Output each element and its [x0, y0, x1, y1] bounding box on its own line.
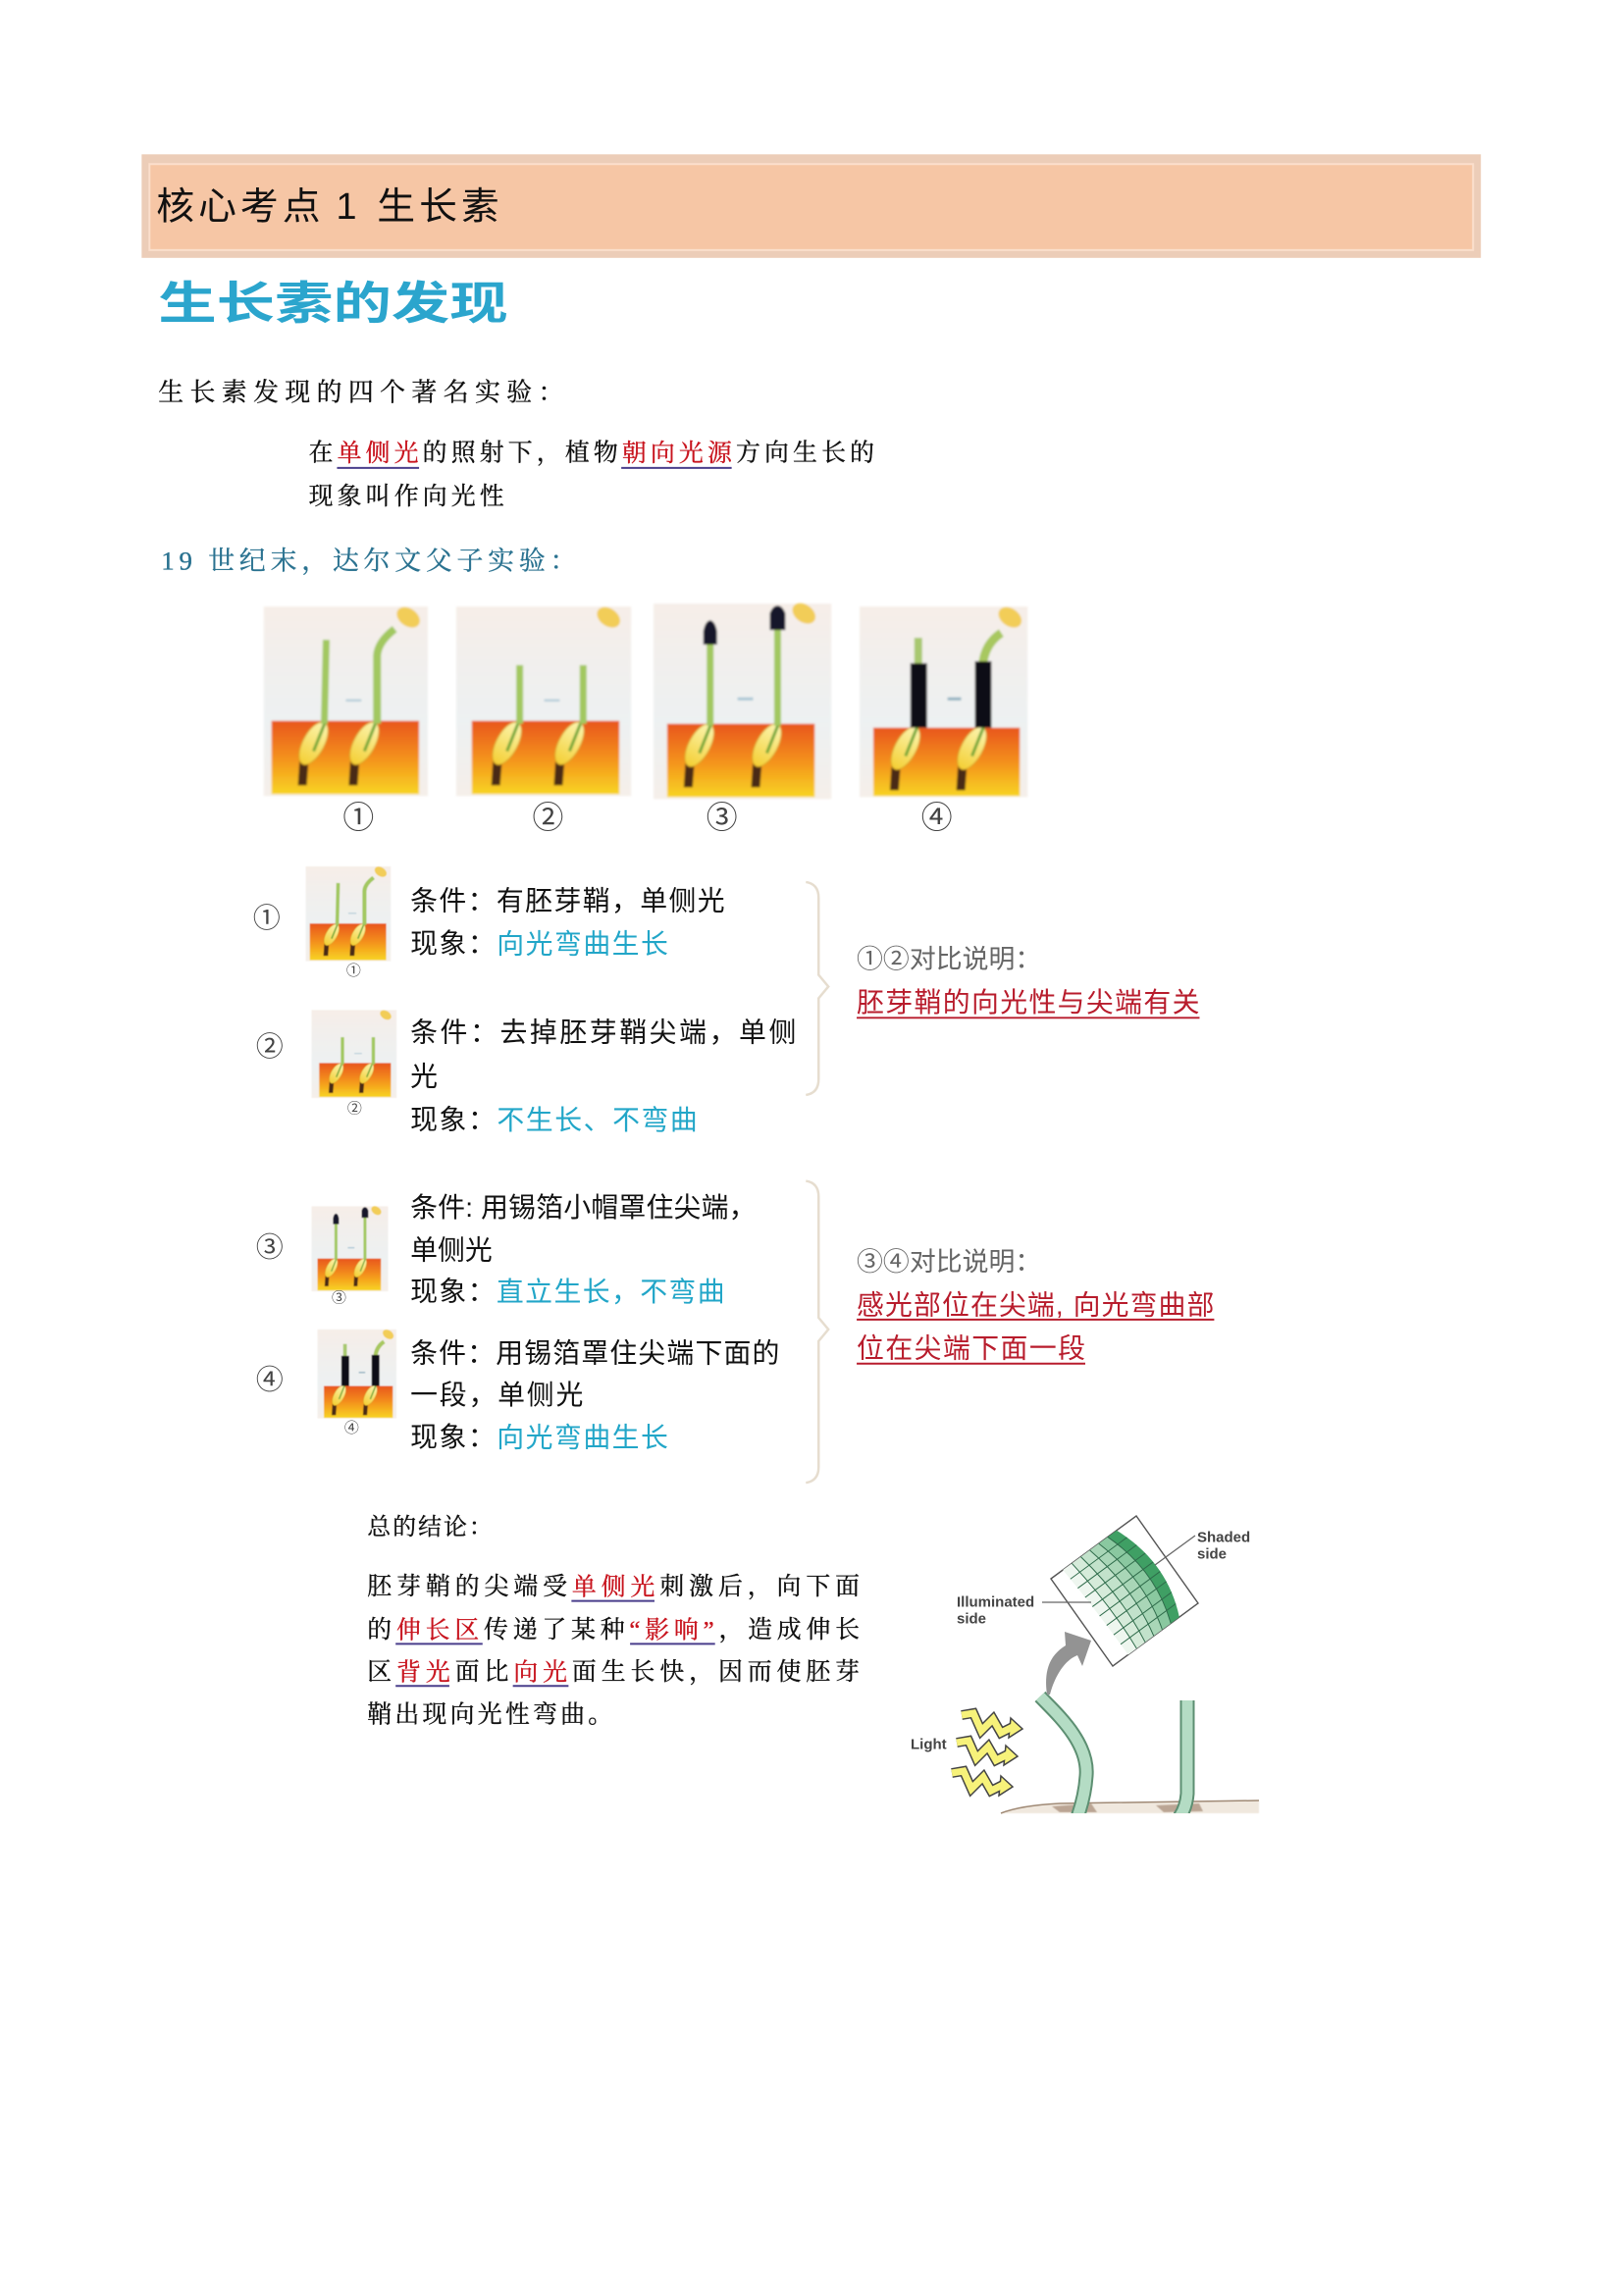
row numbers: ③ — [256, 1226, 284, 1265]
photo numbers — [342, 793, 953, 838]
thumbnails — [306, 864, 396, 1419]
label: illuminated side: Illuminated — [957, 1593, 1034, 1611]
text block: phototropism definition — [309, 439, 874, 510]
block: experiment 3 text: 现象：直立生长，不弯曲 — [410, 1277, 725, 1307]
conclusion text: 区背光面比向光面生长快，因而使胚芽 — [367, 1658, 860, 1686]
intro heading: 生长素发现的四个著名实验： — [158, 379, 563, 407]
arrow — [1046, 1632, 1091, 1695]
conclusion text: 鞘出现向光性弯曲。 — [367, 1701, 612, 1729]
conclusion text: 的伸长区传递了某种“影响”，造成伸长 — [367, 1616, 860, 1644]
brace 2 — [806, 1181, 828, 1483]
banner heading: 生长素 — [377, 186, 499, 229]
callout: comparison 3 and 4: ③④对比说明： — [857, 1247, 1041, 1277]
bent shoot — [1040, 1696, 1086, 1817]
photo numbers: ④ — [921, 793, 953, 838]
panel: experiment 1 — [264, 602, 428, 796]
row numbers: ① — [253, 897, 281, 936]
thumbnail captions: ③ — [332, 1287, 346, 1308]
panel: experiment 4 — [860, 602, 1027, 797]
photo numbers: ② — [533, 793, 563, 838]
thumbnail captions: ④ — [344, 1417, 359, 1437]
banner heading — [156, 186, 499, 229]
conclusion text: 胚芽鞘的尖端受单侧光刺激后，向下面 — [367, 1573, 860, 1600]
experiment heading: 19 世纪末，达尔文父子实验： — [161, 546, 576, 575]
label: shaded side — [1197, 1529, 1250, 1562]
thumbnail 3 — [312, 1204, 388, 1291]
row numbers: ④ — [256, 1359, 284, 1398]
conclusion heading: 总的结论： — [367, 1514, 493, 1540]
label: light: Light — [911, 1737, 947, 1752]
thumbnail captions: ② — [347, 1097, 362, 1118]
block: experiment 3 text: 条件: 用锡箔小帽罩住尖端， — [410, 1192, 757, 1223]
label: shaded side: Shaded — [1197, 1529, 1250, 1546]
icon: cell block — [1051, 1516, 1198, 1666]
block: experiment 4 text: 现象：向光弯曲生长 — [410, 1422, 668, 1452]
label: illuminated side: side — [957, 1611, 986, 1627]
photo numbers: ① — [342, 793, 374, 838]
block: experiment 4 text: 一段，单侧光 — [410, 1380, 583, 1410]
ground — [1001, 1800, 1259, 1813]
leader lines — [1042, 1536, 1195, 1602]
photo numbers: ③ — [707, 793, 738, 838]
experiment photos — [264, 599, 1027, 799]
page content — [141, 154, 1481, 1729]
thumbnail 2 — [312, 1009, 396, 1098]
banner heading: 1 — [336, 186, 356, 228]
thumbnail captions: ① — [346, 960, 361, 980]
row numbers: ② — [256, 1025, 284, 1065]
callout: comparison 3 and 4 — [857, 1247, 1214, 1364]
thumbnail 1 — [306, 864, 391, 962]
row numbers — [253, 897, 284, 1398]
icon: light rays — [952, 1713, 1022, 1796]
callout: comparison 1 and 2: 胚芽鞘的向光性与尖端有关 — [857, 987, 1199, 1018]
panel: experiment 3 — [654, 599, 831, 799]
block: experiment 2 text: 光 — [410, 1062, 438, 1092]
callout: comparison 3 and 4: 位在尖端下面一段 — [857, 1332, 1085, 1363]
block: experiment 2 text — [410, 1018, 796, 1134]
callout: comparison 1 and 2: ①②对比说明： — [857, 945, 1041, 974]
block: experiment 2 text: 现象：不生长、不弯曲 — [410, 1104, 698, 1134]
thumbnail 4 — [318, 1328, 396, 1419]
label: illuminated side — [957, 1593, 1034, 1627]
thumbnail captions — [332, 960, 362, 1437]
text block: phototropism definition: 现象叫作向光性 — [309, 483, 504, 510]
callout: comparison 1 and 2 — [857, 945, 1199, 1018]
block: experiment 3 text — [410, 1192, 757, 1307]
block: experiment 2 text: 条件：去掉胚芽鞘尖端，单侧 — [410, 1018, 796, 1048]
block: experiment 1 text: 现象：向光弯曲生长 — [410, 928, 668, 959]
callout: comparison 3 and 4: 感光部位在尖端, 向光弯曲部 — [857, 1289, 1214, 1320]
block: experiment 1 text — [410, 885, 725, 959]
block: experiment 3 text: 单侧光 — [410, 1235, 493, 1266]
section heading: 生长素的发现 — [158, 279, 508, 329]
diagram: phototropism cell elongation — [911, 1516, 1259, 1817]
panel: experiment 2 — [456, 602, 631, 796]
text block: phototropism definition: 在单侧光的照射下，植物朝向光源方向生长的 — [309, 439, 874, 466]
block: experiment 4 text — [410, 1337, 779, 1452]
label: shaded side: side — [1197, 1546, 1227, 1562]
brace 1 — [806, 882, 828, 1095]
block: experiment 1 text: 条件：有胚芽鞘，单侧光 — [410, 885, 725, 915]
block: experiment 4 text: 条件：用锡箔罩住尖端下面的 — [410, 1337, 779, 1368]
straight shoot — [1179, 1700, 1187, 1817]
conclusion text — [367, 1573, 860, 1729]
title banner — [141, 154, 1481, 258]
banner heading: 核心考点 — [156, 186, 321, 229]
